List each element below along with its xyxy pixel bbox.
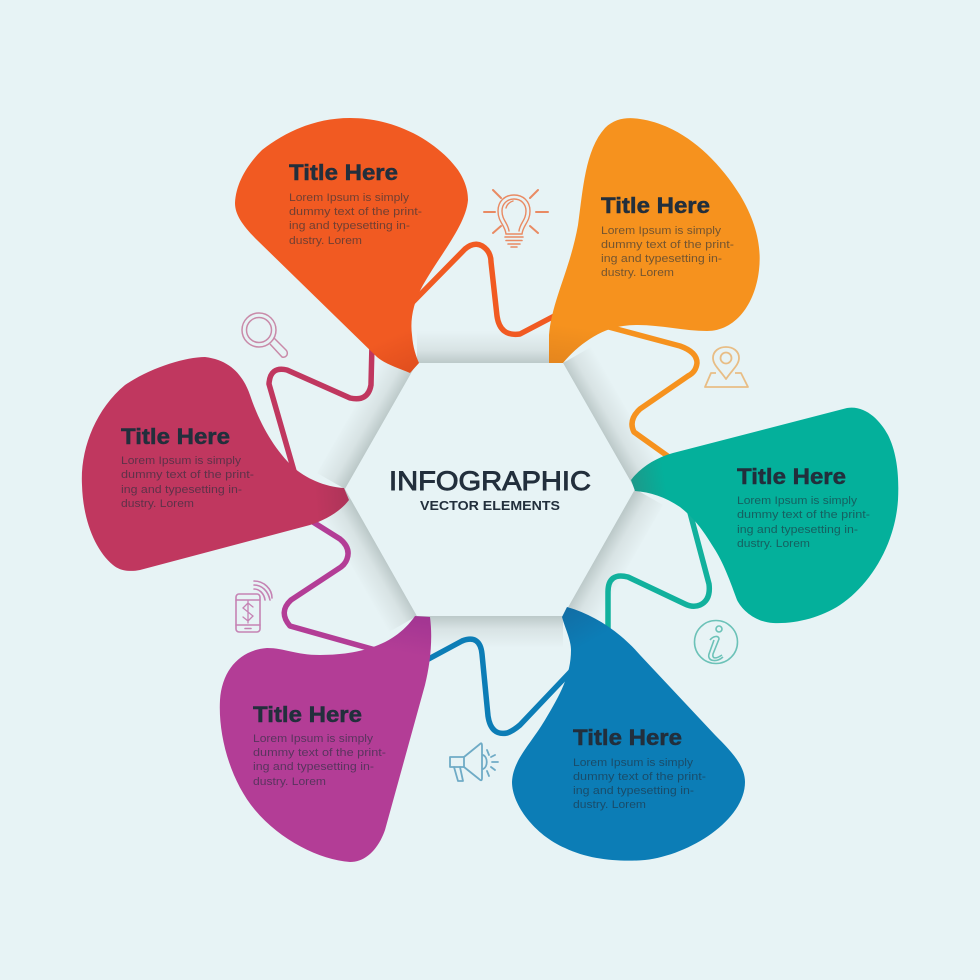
blue heading: Title Here — [573, 725, 682, 750]
red heading: Title Here — [289, 160, 398, 185]
connector: teal — [608, 505, 709, 635]
red text: ing and typesetting in- — [289, 220, 410, 232]
panel: orange — [549, 118, 760, 363]
crimson text: dummy text of the print- — [121, 469, 254, 481]
blue blob — [512, 607, 745, 861]
red text: dummy text of the print- — [289, 206, 422, 218]
orange blob — [549, 118, 760, 363]
red text: Lorem Ipsum is simply — [289, 192, 410, 204]
magenta blob — [220, 616, 431, 862]
crimson text: Lorem Ipsum is simply — [121, 455, 242, 467]
blue text — [573, 757, 706, 811]
icon: phone with dollar — [236, 581, 272, 632]
panel: teal — [631, 408, 898, 623]
orange text: dustry. Lorem — [601, 267, 674, 279]
teal text — [737, 495, 870, 550]
teal text: Lorem Ipsum is simply — [737, 495, 858, 507]
center subtitle: VECTOR ELEMENTS — [420, 498, 560, 513]
teal heading: Title Here — [737, 464, 846, 489]
crimson text: dustry. Lorem — [121, 498, 194, 510]
orange text: ing and typesetting in- — [601, 253, 722, 265]
magenta heading: Title Here — [253, 702, 362, 727]
teal text: ing and typesetting in- — [737, 524, 858, 536]
magenta text: dummy text of the print- — [253, 747, 386, 759]
blue text: Lorem Ipsum is simply — [573, 757, 694, 769]
icon: light bulb — [484, 190, 548, 247]
connector: blue — [423, 639, 576, 733]
hexagon fold shadows — [317, 331, 663, 648]
magenta text — [253, 733, 386, 788]
blue text: ing and typesetting in- — [573, 785, 694, 797]
connector: crimson — [269, 344, 372, 478]
blue text: dummy text of the print- — [573, 771, 706, 783]
panel: crimson — [82, 357, 349, 571]
teal blob — [631, 408, 898, 623]
blue text: dustry. Lorem — [573, 799, 646, 811]
icon: info — [694, 620, 738, 664]
panel: magenta — [220, 616, 431, 862]
orange text — [601, 225, 734, 279]
connector: magenta — [284, 517, 386, 653]
icon: megaphone — [450, 743, 498, 781]
crimson text — [121, 455, 254, 510]
orange text: dummy text of the print- — [601, 239, 734, 251]
crimson blob — [82, 357, 349, 571]
panel: blue — [512, 607, 745, 861]
orange heading: Title Here — [601, 193, 710, 218]
magenta text: Lorem Ipsum is simply — [253, 733, 374, 745]
crimson text: ing and typesetting in- — [121, 484, 242, 496]
center hexagon — [345, 363, 635, 616]
icon: map pin — [705, 347, 748, 387]
red blob — [235, 118, 468, 373]
connector: orange — [605, 326, 697, 462]
icon: magnifier — [242, 313, 287, 357]
panel: red — [235, 118, 468, 373]
magenta text: dustry. Lorem — [253, 776, 326, 788]
crimson heading: Title Here — [121, 424, 230, 449]
orange text: Lorem Ipsum is simply — [601, 225, 722, 237]
connector: red — [409, 244, 560, 334]
center title: INFOGRAPHIC — [389, 466, 591, 496]
red text: dustry. Lorem — [289, 235, 362, 247]
teal text: dustry. Lorem — [737, 538, 810, 550]
red text — [289, 192, 422, 247]
magenta text: ing and typesetting in- — [253, 761, 374, 773]
teal text: dummy text of the print- — [737, 509, 870, 521]
